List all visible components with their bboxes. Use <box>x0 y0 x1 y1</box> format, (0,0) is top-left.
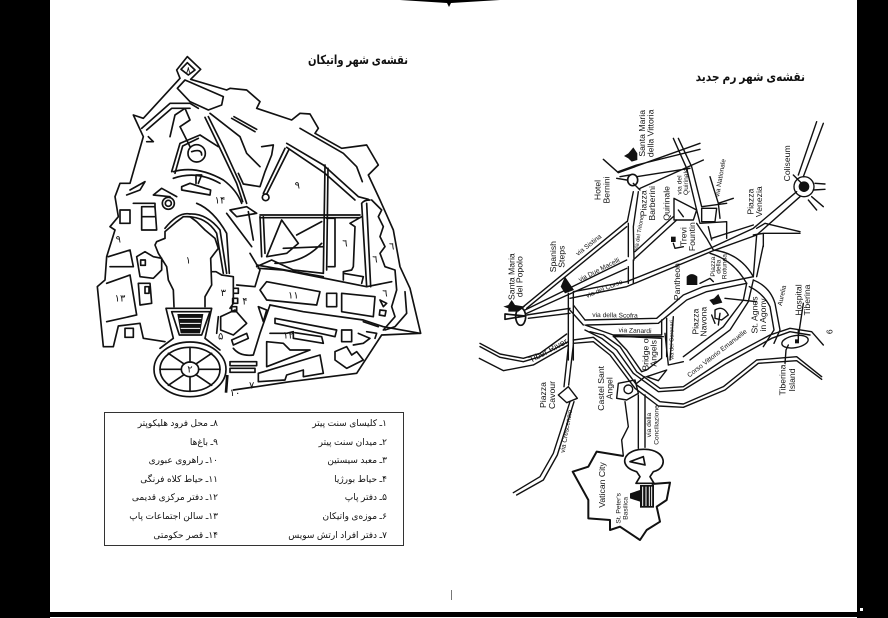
via della Conciliazione <box>638 395 645 448</box>
labels: Aurelia <box>777 285 788 307</box>
labels: Bridge of <box>640 335 650 371</box>
labels: Rotunda <box>722 254 729 279</box>
labels: Angel <box>605 377 615 399</box>
labels: Angels <box>649 339 659 367</box>
labels: Navona <box>699 307 709 337</box>
legend: right column: ۶ـ موزه‌ی واتیکان <box>323 511 387 521</box>
map number labels: ١١ <box>288 290 299 301</box>
labels: Pantheon <box>672 263 682 300</box>
leader lines <box>617 175 803 337</box>
labels: Santa Maria <box>637 110 647 157</box>
labels: via dei Coronari <box>669 320 675 360</box>
legend: left column: ١٠ـ راهروی عبوری <box>149 455 218 465</box>
labels: Vatican City <box>597 462 607 508</box>
icon: Spanish Steps <box>561 277 574 293</box>
labels: Hospital <box>794 284 804 316</box>
map number labels: ٩ <box>295 180 300 191</box>
Castel Sant'Angelo <box>617 380 638 400</box>
title: Rome map: نقشه‌ی شهر رم جدید <box>696 70 805 85</box>
block: Bridge of Angels area <box>613 333 683 383</box>
icon: St Agnes <box>709 294 722 305</box>
outer boundary wall <box>97 57 421 390</box>
labels: via del <box>677 175 684 195</box>
labels: Castel Sant <box>596 365 606 411</box>
legend: right column: ۵ـ دفتر پاپ <box>345 492 387 502</box>
map number labels: ١٣ <box>115 294 126 305</box>
title: Vatican map: نقشه‌ی شهر واتیکان <box>308 54 408 67</box>
Tiber River banks <box>479 328 823 407</box>
map number labels: ٢ <box>187 364 193 375</box>
Piazza Navona <box>712 308 728 325</box>
map: modern Rome, north part <box>503 109 834 360</box>
building: Palazzina circles <box>162 145 269 209</box>
labels: via della <box>646 412 653 437</box>
labels: del Popolo <box>515 256 525 297</box>
building: west complex <box>107 203 162 337</box>
map number labels: ١٢ <box>283 330 294 341</box>
legend: left column: ١۴ـ قصر حکومتی <box>153 530 218 540</box>
map number labels: ٣ <box>221 288 227 299</box>
labels: Conciliazione <box>653 405 660 445</box>
legend: left column: ١٢ـ دفتر مرکزی قدیمی <box>132 492 218 502</box>
labels: Barberini <box>647 186 657 221</box>
labels: via Zanardi <box>618 327 652 335</box>
passage: corridor 10 <box>226 375 227 393</box>
labels: della Vittoria <box>645 109 655 157</box>
map number labels: ١ <box>186 255 191 266</box>
labels: Tiberina <box>802 284 812 315</box>
St Peter's Square paving hatch <box>177 314 203 333</box>
legend: left column: ١١ـ حیاط کلاه فرنگی <box>140 473 218 484</box>
labels: Corso Vittorio Emanuelle <box>686 328 749 379</box>
St Peter's Square <box>154 308 226 397</box>
labels: Fountin <box>687 222 697 251</box>
labels: Hotel <box>593 180 603 200</box>
map number labels: ١۴ <box>215 195 225 206</box>
map number labels: ۵ <box>218 331 223 342</box>
labels: Piazza <box>745 188 755 215</box>
roads: via Crescenzio and Cavour <box>513 345 574 495</box>
Piazza del Popolo <box>505 308 526 325</box>
labels: via Crescenzio <box>560 409 574 454</box>
gardens roads and paths <box>127 80 397 330</box>
legend: right column: ۴ـ حیاط بورژیا <box>334 474 387 484</box>
labels: Steps <box>556 245 566 268</box>
legend: left column: ٩ـ باغ‌ها <box>190 437 218 447</box>
labels: Spanish <box>548 241 558 272</box>
labels: Piazza <box>690 308 700 335</box>
labels: Tiber River <box>527 336 569 365</box>
labels: Santa Maria <box>506 253 516 300</box>
legend: left column <box>129 418 218 540</box>
labels: Basilica <box>622 497 629 520</box>
Tiberina Island <box>781 330 809 363</box>
building: St Peter's Basilica <box>155 217 218 307</box>
building: governor's palace <box>182 175 211 195</box>
labels: via del Tritone <box>634 215 646 251</box>
labels: Bernini <box>601 176 611 203</box>
icon: Pantheon <box>687 274 697 285</box>
building: Quirinale <box>674 198 697 220</box>
map number labels: ٨ <box>186 65 192 76</box>
labels: Coliseum <box>782 145 792 181</box>
legend: right column: ٧ـ دفتر افراد ارتش سویس <box>288 530 387 540</box>
labels: via Due Macelli <box>578 257 621 284</box>
labels: Venezia <box>754 186 764 217</box>
map: Vatican City <box>97 57 421 399</box>
labels: Trevi <box>679 227 689 246</box>
city blocks: southeast <box>217 305 377 382</box>
labels: 6 <box>824 329 834 334</box>
Piazza Barberini <box>628 174 638 186</box>
building: Sistine and apostolic palace <box>212 272 247 335</box>
labels: via del Corso <box>585 279 624 300</box>
Passetto wall <box>622 402 628 456</box>
Vatican City outline <box>573 452 670 540</box>
legend: left column: ١٣ـ سالن اجتماعات پاپ <box>129 511 218 521</box>
labels: in Agony <box>758 298 768 332</box>
St Peter's Square keyhole <box>625 449 663 483</box>
map: modern Rome, south part <box>479 320 823 540</box>
map number labels <box>115 65 394 399</box>
labels: Tiberina <box>778 364 788 395</box>
labels: St. Peter's <box>616 492 623 524</box>
legend: right column: ١ـ کلیسای سنت پیتر <box>311 418 387 428</box>
Piazza Cavour <box>558 387 577 403</box>
labels: via Sistina <box>575 233 603 258</box>
labels: Quirinale <box>683 168 690 195</box>
top helipad diamond <box>181 63 195 75</box>
labels: via della Scofra <box>592 312 638 320</box>
labels: Piazza <box>639 190 649 216</box>
labels: St. Agnes <box>749 296 759 334</box>
map number labels: ۴ <box>242 296 248 307</box>
legend: left column: ٨ـ محل فرود هلیکوپتر <box>137 418 218 428</box>
map number labels: ٦ <box>382 289 388 300</box>
labels: Piazza <box>710 256 717 277</box>
labels: Island <box>787 368 797 392</box>
icon: St Peter's Basilica <box>630 485 654 508</box>
Belvedere courtyards <box>257 217 420 333</box>
map number labels: ٦ <box>372 255 378 266</box>
map number labels: ٩ <box>116 235 121 246</box>
legend box <box>104 412 404 546</box>
map number labels: ٦ <box>342 239 348 250</box>
labels: via Nationale <box>714 158 728 198</box>
labels: Cavour <box>547 381 557 409</box>
map number labels: ١٠ <box>230 388 240 399</box>
icon: Santa Maria della Vittoria <box>624 147 637 162</box>
legend: right column <box>288 418 387 540</box>
labels: Quirinale <box>661 186 671 221</box>
labels: Piazza <box>538 382 548 408</box>
icon: Santa Maria del Popolo <box>503 300 525 312</box>
labels: della <box>716 259 723 274</box>
map number labels: ٧ <box>249 380 255 391</box>
legend: right column: ٣ـ معبد سیستین <box>327 455 387 465</box>
labels <box>506 109 834 337</box>
icon: Trevi Fountain <box>671 237 676 242</box>
roads <box>523 122 825 360</box>
legend: right column: ٢ـ میدان سنت پیتر <box>318 437 387 447</box>
Coliseum <box>794 177 814 197</box>
labels <box>527 320 797 524</box>
map number labels: ٦ <box>389 241 394 252</box>
